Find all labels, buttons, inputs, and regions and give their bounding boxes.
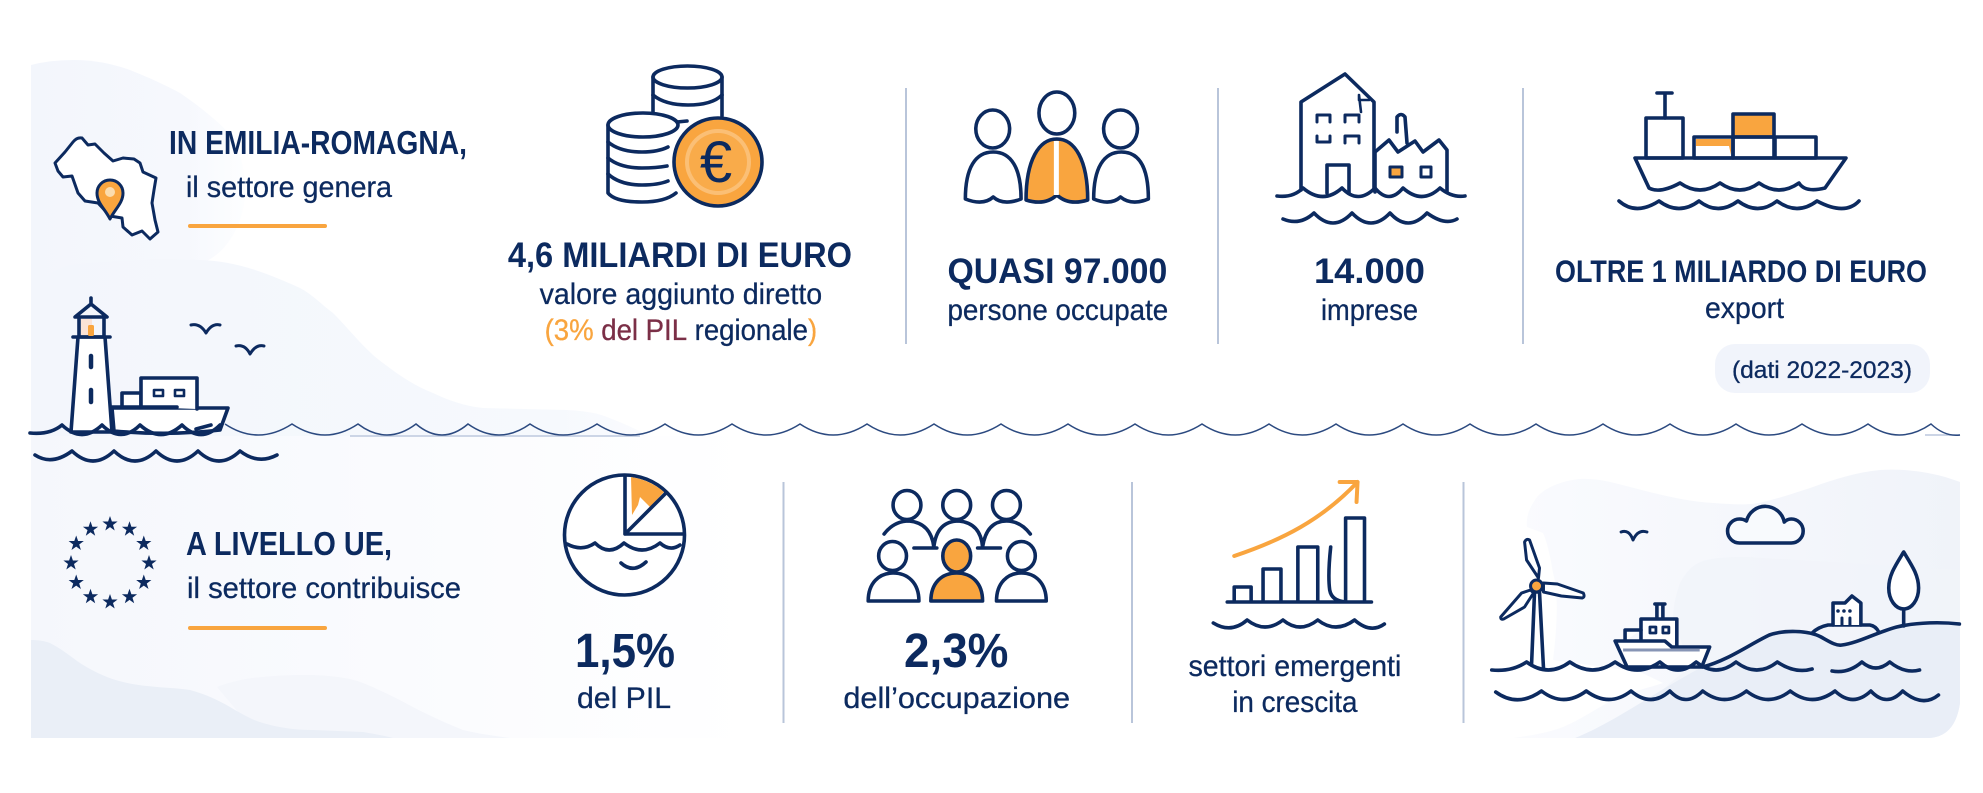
icon: boat	[1615, 604, 1710, 667]
divider	[1217, 88, 1219, 344]
stat: 1,5% del PIL: 1,5%	[575, 625, 675, 678]
stat: 14.000 imprese: 14.000	[1314, 252, 1425, 291]
stat: quasi 97.000	[947, 252, 1168, 327]
divider	[1462, 482, 1464, 723]
icon: buildings on water	[1277, 74, 1465, 223]
stat: 2,3% occupazione: dell’occupazione	[843, 682, 1070, 715]
divider	[1522, 88, 1524, 344]
divider	[1131, 482, 1133, 723]
icon: Emilia-Romagna map with pin	[55, 138, 158, 239]
text: settori emergenti	[1188, 650, 1401, 719]
icon: lighthouse and boat with waves	[30, 298, 277, 461]
background: lower-left panel	[31, 436, 751, 738]
stat: 14.000 imprese: imprese	[1321, 294, 1418, 327]
heading: Emilia-Romagna: IN EMILIA-ROMAGNA,	[169, 124, 467, 161]
stat: quasi 97.000: QUASI 97.000	[947, 252, 1167, 291]
icon: group of people	[868, 490, 1046, 601]
icon: bird	[1621, 531, 1647, 540]
icon: hill with house and tree	[1703, 552, 1959, 667]
stat: 2,3% occupazione: 2,3%	[904, 625, 1008, 678]
heading: Emilia-Romagna	[169, 124, 467, 228]
stat: oltre 1 miliardo di euro: OLTRE 1 MILIARDO DI EURO	[1555, 253, 1927, 289]
heading: livello UE	[186, 525, 461, 630]
badge: dati 2022-2023	[1715, 344, 1930, 393]
text: settori emergenti: settori emergenti	[1188, 650, 1401, 683]
stat: 1,5% del PIL	[575, 625, 675, 715]
icon: container ship	[1619, 93, 1859, 208]
heading: Emilia-Romagna: il settore genera	[186, 171, 392, 204]
background: lower-right scene	[1513, 470, 1960, 738]
icon: cloud	[1728, 506, 1803, 543]
stat: 1,5% del PIL: del PIL	[577, 682, 671, 715]
divider	[782, 482, 784, 723]
icon: seagulls	[191, 325, 264, 354]
background: upper-left waves	[31, 60, 646, 436]
stat: oltre 1 miliardo di euro: export	[1705, 292, 1784, 325]
wave divider	[225, 424, 1960, 436]
illustration: blue economy scene	[1492, 506, 1959, 701]
stat: 4,6 miliardi di euro	[508, 236, 852, 347]
icon: coin stacks with euro: €	[700, 130, 732, 195]
icon: growing bar chart with arrow	[1213, 482, 1384, 628]
divider	[905, 88, 907, 344]
stat: 14.000 imprese	[1314, 252, 1425, 327]
badge: dati 2022-2023: (dati 2022-2023)	[1732, 357, 1912, 384]
icon: EU stars	[63, 516, 157, 608]
heading: livello UE: il settore contribuisce	[187, 572, 461, 605]
stat: oltre 1 miliardo di euro	[1555, 253, 1927, 325]
stat: 4,6 miliardi di euro: 4,6 MILIARDI DI EURO	[508, 236, 852, 275]
icon: pie chart with wave	[564, 475, 684, 595]
icon: scene waves	[1492, 662, 1938, 701]
stat: 4,6 miliardi di euro: (3% del PIL regionale)	[545, 314, 817, 347]
icon: coin stacks with euro	[608, 66, 762, 206]
icon: three people	[965, 92, 1148, 202]
text: settori emergenti: in crescita	[1232, 686, 1358, 719]
stat: quasi 97.000: persone occupate	[947, 294, 1168, 327]
heading: livello UE: A LIVELLO UE,	[186, 525, 392, 562]
icon: wind turbine	[1501, 539, 1584, 668]
stat: 2,3% occupazione	[843, 625, 1070, 715]
stat: 4,6 miliardi di euro: valore aggiunto diretto	[540, 278, 822, 311]
